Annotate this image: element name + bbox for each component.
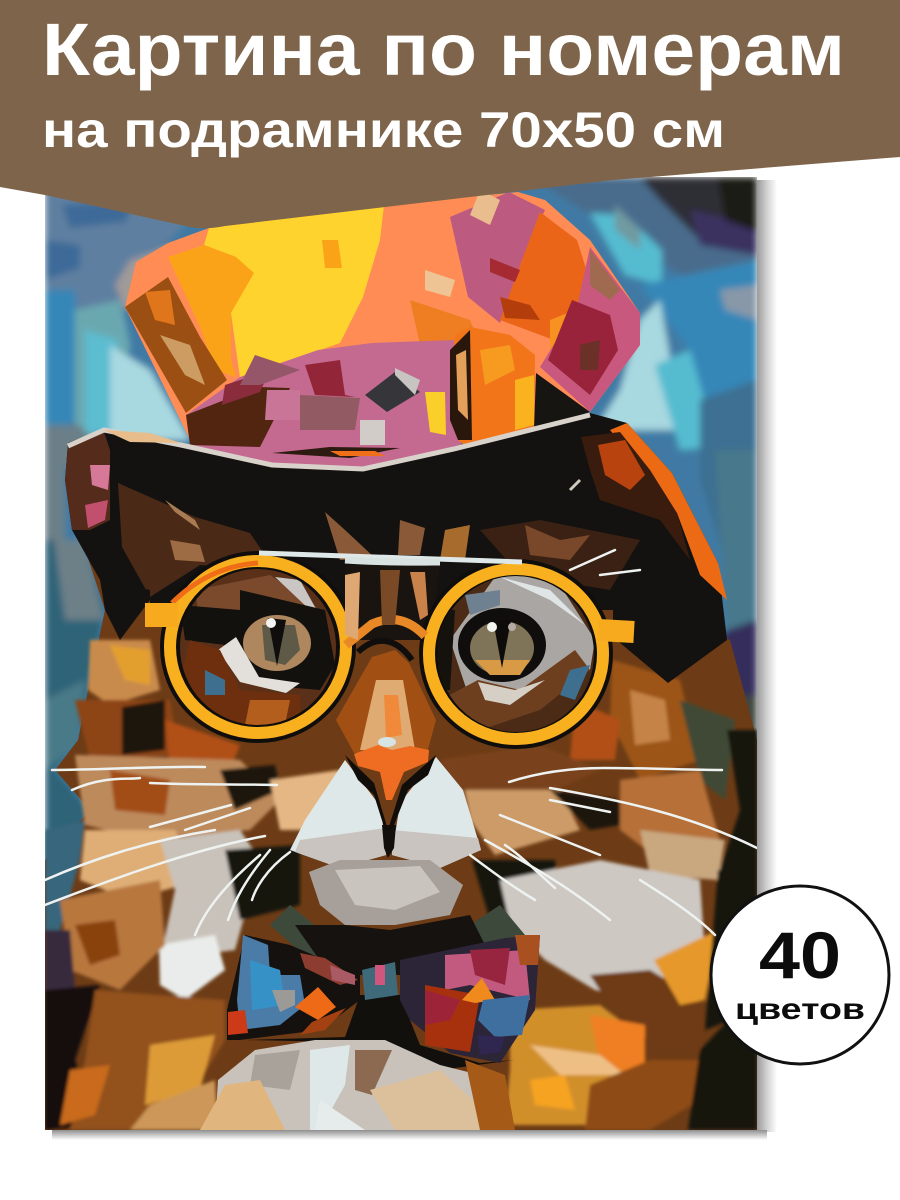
badge caption: цветов bbox=[735, 993, 865, 1026]
hat band bbox=[186, 340, 462, 475]
cat ear and forehead bbox=[100, 483, 640, 640]
badge: 40 colours bbox=[711, 886, 889, 1064]
cat fur body bbox=[45, 540, 757, 1130]
right lens bbox=[438, 576, 594, 732]
hat buckle bbox=[450, 327, 590, 450]
hat crown bbox=[125, 190, 640, 440]
right cheek fur bbox=[610, 660, 700, 780]
canvas edge shadow bbox=[52, 180, 777, 1140]
hat brim bbox=[65, 413, 727, 683]
painting: cat in hat and glasses bbox=[45, 177, 757, 1130]
glasses lenses and eyes bbox=[145, 553, 634, 747]
right wing bbox=[445, 950, 530, 1000]
nose bridge bbox=[336, 570, 436, 753]
painting background bbox=[45, 177, 757, 860]
cat muzzle bbox=[290, 757, 481, 868]
white chest fur bbox=[200, 1040, 515, 1130]
badge number: 40 bbox=[759, 918, 841, 992]
cat chin bbox=[270, 860, 525, 975]
whiskers bbox=[45, 550, 757, 935]
left wing bbox=[237, 935, 305, 1030]
left lens bbox=[180, 569, 336, 725]
header banner bbox=[0, 0, 900, 228]
title: Картина по номерам bbox=[42, 8, 845, 91]
centre knot bbox=[362, 962, 398, 1000]
subtitle: на подрамнике 70х50 см bbox=[42, 102, 725, 158]
forehead band behind lenses bbox=[358, 610, 434, 640]
cat nose bbox=[345, 737, 436, 830]
glasses frame bbox=[145, 553, 634, 747]
bow tie bbox=[227, 935, 540, 1070]
left cheek fur bbox=[88, 640, 160, 705]
